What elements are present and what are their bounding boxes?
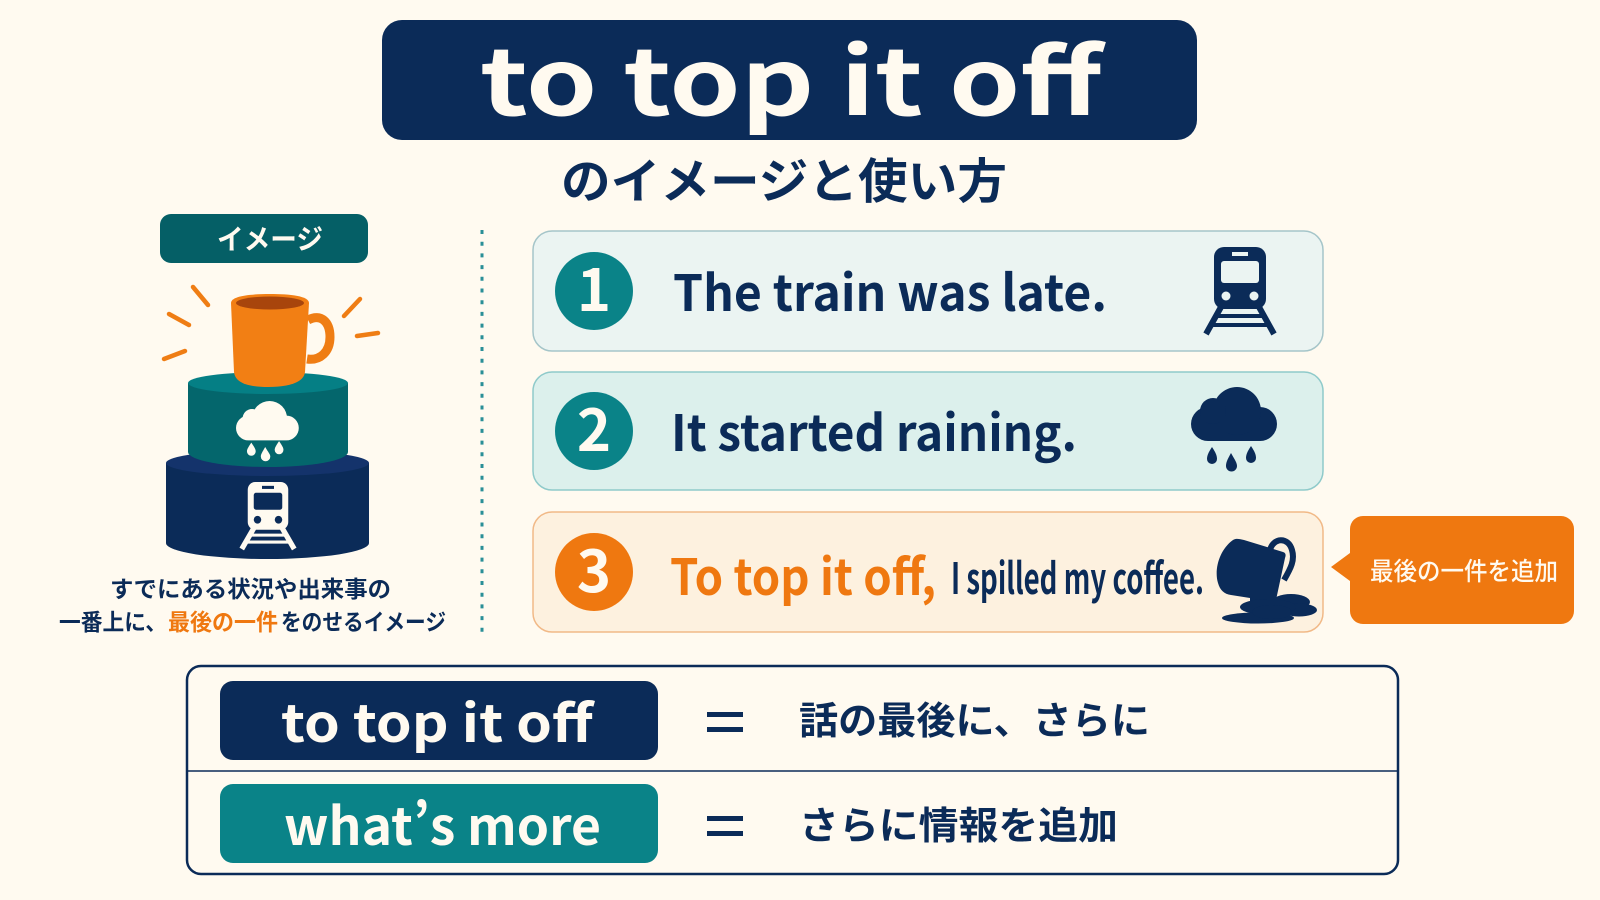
panel: meaning table [187,666,1398,874]
equals sign [707,816,743,836]
sentence text 3: I spilled my coffee. [951,545,1204,607]
number badge 3 [555,525,633,611]
number badge 2: 2 [577,384,611,468]
icon: orange mug on top [231,294,330,387]
number badge 2 [555,384,633,470]
callout: add one last thing: 最後の一件を追加 [1370,552,1558,588]
meaning text: さらに情報を追加 [799,795,1118,850]
icon: spilled cup [1217,539,1317,624]
number badge 1 [555,244,633,330]
icon: rain cloud [1191,387,1277,472]
meaning text: 話の最後に、さらに [799,690,1150,745]
row: to top it off [220,681,1150,760]
panel: sentence 1 [533,231,1323,351]
image label: イメージ [217,218,323,258]
highlighted phrase: To top it off, [670,538,936,610]
teal middle tier with cloud [188,372,348,467]
image caption: 最後の一件 [168,603,278,637]
number badge 1: 1 [577,244,611,328]
image label [160,214,368,263]
icon: white rain cloud [236,401,299,461]
panel: sentence 2 [533,372,1323,490]
sentence text 1: The train was late. [673,254,1107,326]
panel: sentence 3 [533,512,1323,632]
navy base tier with train [166,450,369,559]
row: what's more [220,784,1118,863]
number badge 3: 3 [577,525,611,609]
image caption: をのせるイメージ [281,603,446,637]
image caption [59,570,446,637]
title banner [382,9,1197,142]
row: what's more: what’s more [284,785,601,860]
panel: image illustration [59,214,446,637]
image caption: 一番上に、 [59,603,167,637]
equals sign [707,712,743,732]
icon: train [1206,247,1274,334]
title banner: to top it off [480,9,1107,142]
row: to top it off: to top it off [281,682,596,757]
sentence text 2: It started raining. [671,394,1077,466]
subtitle: のイメージと使い方 [561,142,1007,212]
image caption: すでにある状況や出来事の [110,570,391,604]
icon: white train [242,482,294,549]
callout: add one last thing [1331,516,1574,624]
icon: burst rays around mug [164,287,378,359]
